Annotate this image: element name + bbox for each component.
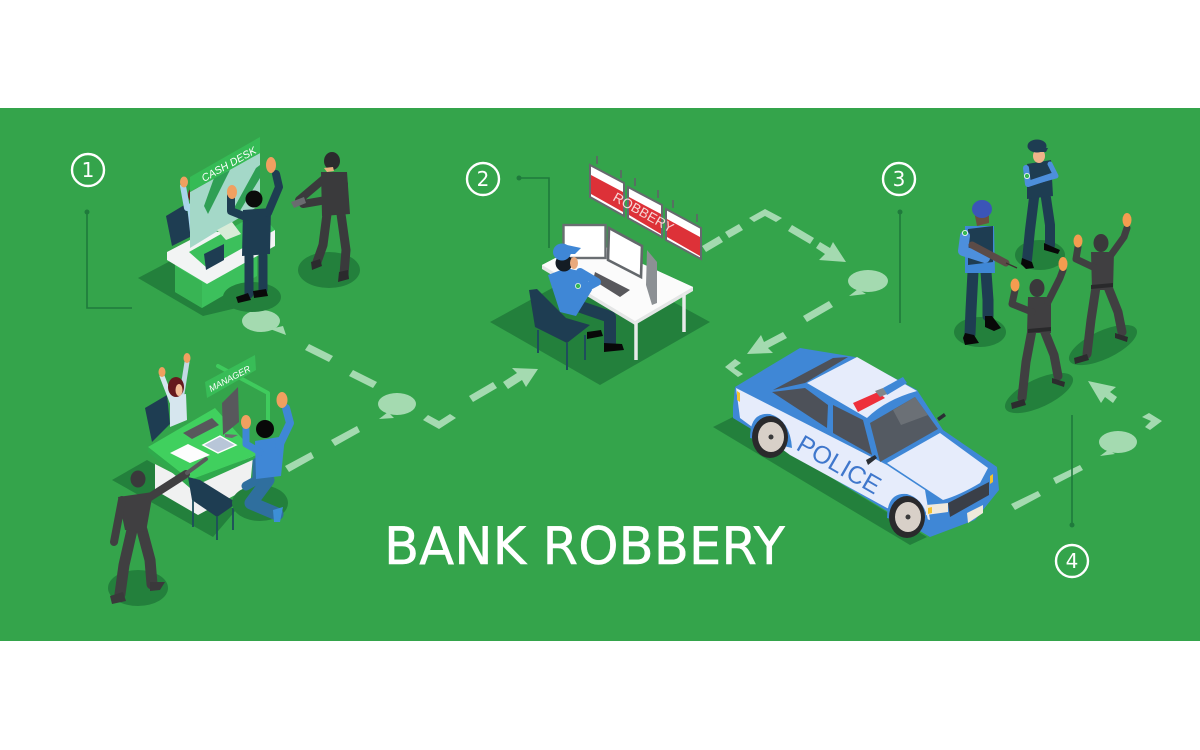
car body: [733, 348, 999, 537]
desk base side shade: [175, 266, 202, 308]
desk white top: [167, 230, 275, 284]
step 1 number and leader: 1: [82, 158, 94, 182]
tablet: [203, 436, 236, 453]
rear window: [773, 357, 848, 390]
dashes from robbery sign: [702, 224, 743, 252]
chevron at car: [725, 359, 743, 377]
car shadow: [713, 417, 927, 545]
step 4 number and leader: 4: [1066, 549, 1078, 573]
paper: [170, 444, 210, 463]
robber with gun: [291, 152, 360, 288]
rear wheel: [750, 414, 792, 458]
step 1 number and leader: [72, 154, 132, 308]
briefcase: [204, 244, 224, 270]
side window front: [833, 405, 872, 455]
step 3 number and leader: [883, 163, 915, 323]
desk green base: [175, 254, 257, 308]
desk legs: [636, 293, 684, 360]
guard at monitors: [548, 244, 624, 352]
money pile: [217, 222, 241, 240]
dash to arrow: [469, 382, 497, 402]
car roof: [807, 357, 917, 418]
step 2 number and leader: [467, 163, 549, 248]
keyboard: [183, 418, 219, 439]
manager woman hands up: [158, 353, 190, 427]
desk counter green: [189, 212, 275, 268]
arrow to step 2: [503, 368, 538, 389]
police lettering: POLICE: [792, 430, 886, 500]
mirrors: [866, 413, 946, 465]
chevron bottom: [423, 414, 456, 429]
title: BANK ROBBERY: [384, 517, 785, 577]
light bar red: [853, 392, 885, 412]
side window rear: [772, 388, 828, 428]
license plate: [967, 505, 983, 523]
desk edge: [148, 447, 257, 488]
front wheel: [887, 494, 929, 538]
desk top: [542, 240, 693, 325]
robber hands up right: [1064, 213, 1142, 373]
headlights: [737, 391, 993, 515]
keyboard: [593, 272, 630, 297]
customer in suit: [223, 157, 281, 312]
clerk with raised hands: [180, 176, 206, 232]
chevron right: [1142, 413, 1162, 430]
scene: security monitoring room: [490, 156, 710, 385]
windshield: [870, 397, 938, 462]
police car: [713, 348, 999, 545]
light bar blue: [883, 377, 907, 395]
dash right: [788, 225, 814, 244]
dashes after desk: [305, 344, 377, 388]
step 3 number and leader: 3: [893, 167, 905, 191]
manager chair: [145, 395, 170, 442]
robbery alarm sign: [590, 156, 701, 259]
scene: police arrest robbers: [954, 140, 1142, 421]
speech bubble 1: [242, 310, 286, 335]
robber pointing gun: [108, 459, 206, 606]
step 4 number and leader: [1056, 415, 1088, 577]
sign text: CASH DESK: [200, 144, 259, 185]
scene: manager office robbery: [108, 353, 290, 606]
speech bubble 4: [1099, 431, 1137, 456]
sign frame arms: [218, 366, 268, 422]
dash to police car: [803, 301, 833, 322]
car hood: [887, 433, 988, 500]
desk floor shadow: [138, 258, 270, 316]
kneeling man in blue: [232, 392, 290, 522]
chevron top: [749, 209, 782, 222]
office chair: [188, 477, 237, 540]
speech bubble 2: [378, 393, 416, 419]
arrow to robbers: [1088, 381, 1117, 403]
arrow to bubble: [816, 242, 846, 262]
manager sign text: MANAGER: [207, 363, 253, 394]
monitor left: [564, 225, 606, 258]
monitor middle: [608, 228, 642, 277]
arrow to car: [747, 332, 787, 354]
scene: cash desk robbery: [138, 137, 360, 316]
robbery sign text: ROBBERY: [611, 190, 676, 236]
monitor: [222, 387, 239, 438]
grille: [948, 482, 989, 517]
room floor shadow: [490, 262, 710, 385]
cash desk sign: [190, 137, 260, 192]
monitor right: [646, 250, 657, 305]
step 2 number and leader: 2: [477, 167, 489, 191]
desk top green: [148, 408, 257, 480]
clerk chair: [166, 204, 192, 246]
glass screen: [190, 153, 260, 248]
officer with crossed arms: [1015, 140, 1065, 270]
light bar center: [875, 388, 887, 397]
robber hands up middle: [1000, 257, 1078, 421]
flow path: dashes, speech bubbles and arrows: [242, 209, 1162, 510]
office floor shadow: [112, 460, 236, 537]
manager sign: [205, 355, 256, 398]
glass green stripes: [204, 165, 260, 214]
car side panel: [736, 388, 930, 520]
desk legs white: [155, 456, 253, 515]
dashes from manager: [285, 426, 360, 472]
green panel background: [0, 108, 1200, 641]
speech bubble 3: [848, 270, 888, 296]
officer with rifle: [954, 200, 1017, 347]
dashes from car: [1011, 465, 1083, 510]
guard chair: [529, 289, 590, 370]
